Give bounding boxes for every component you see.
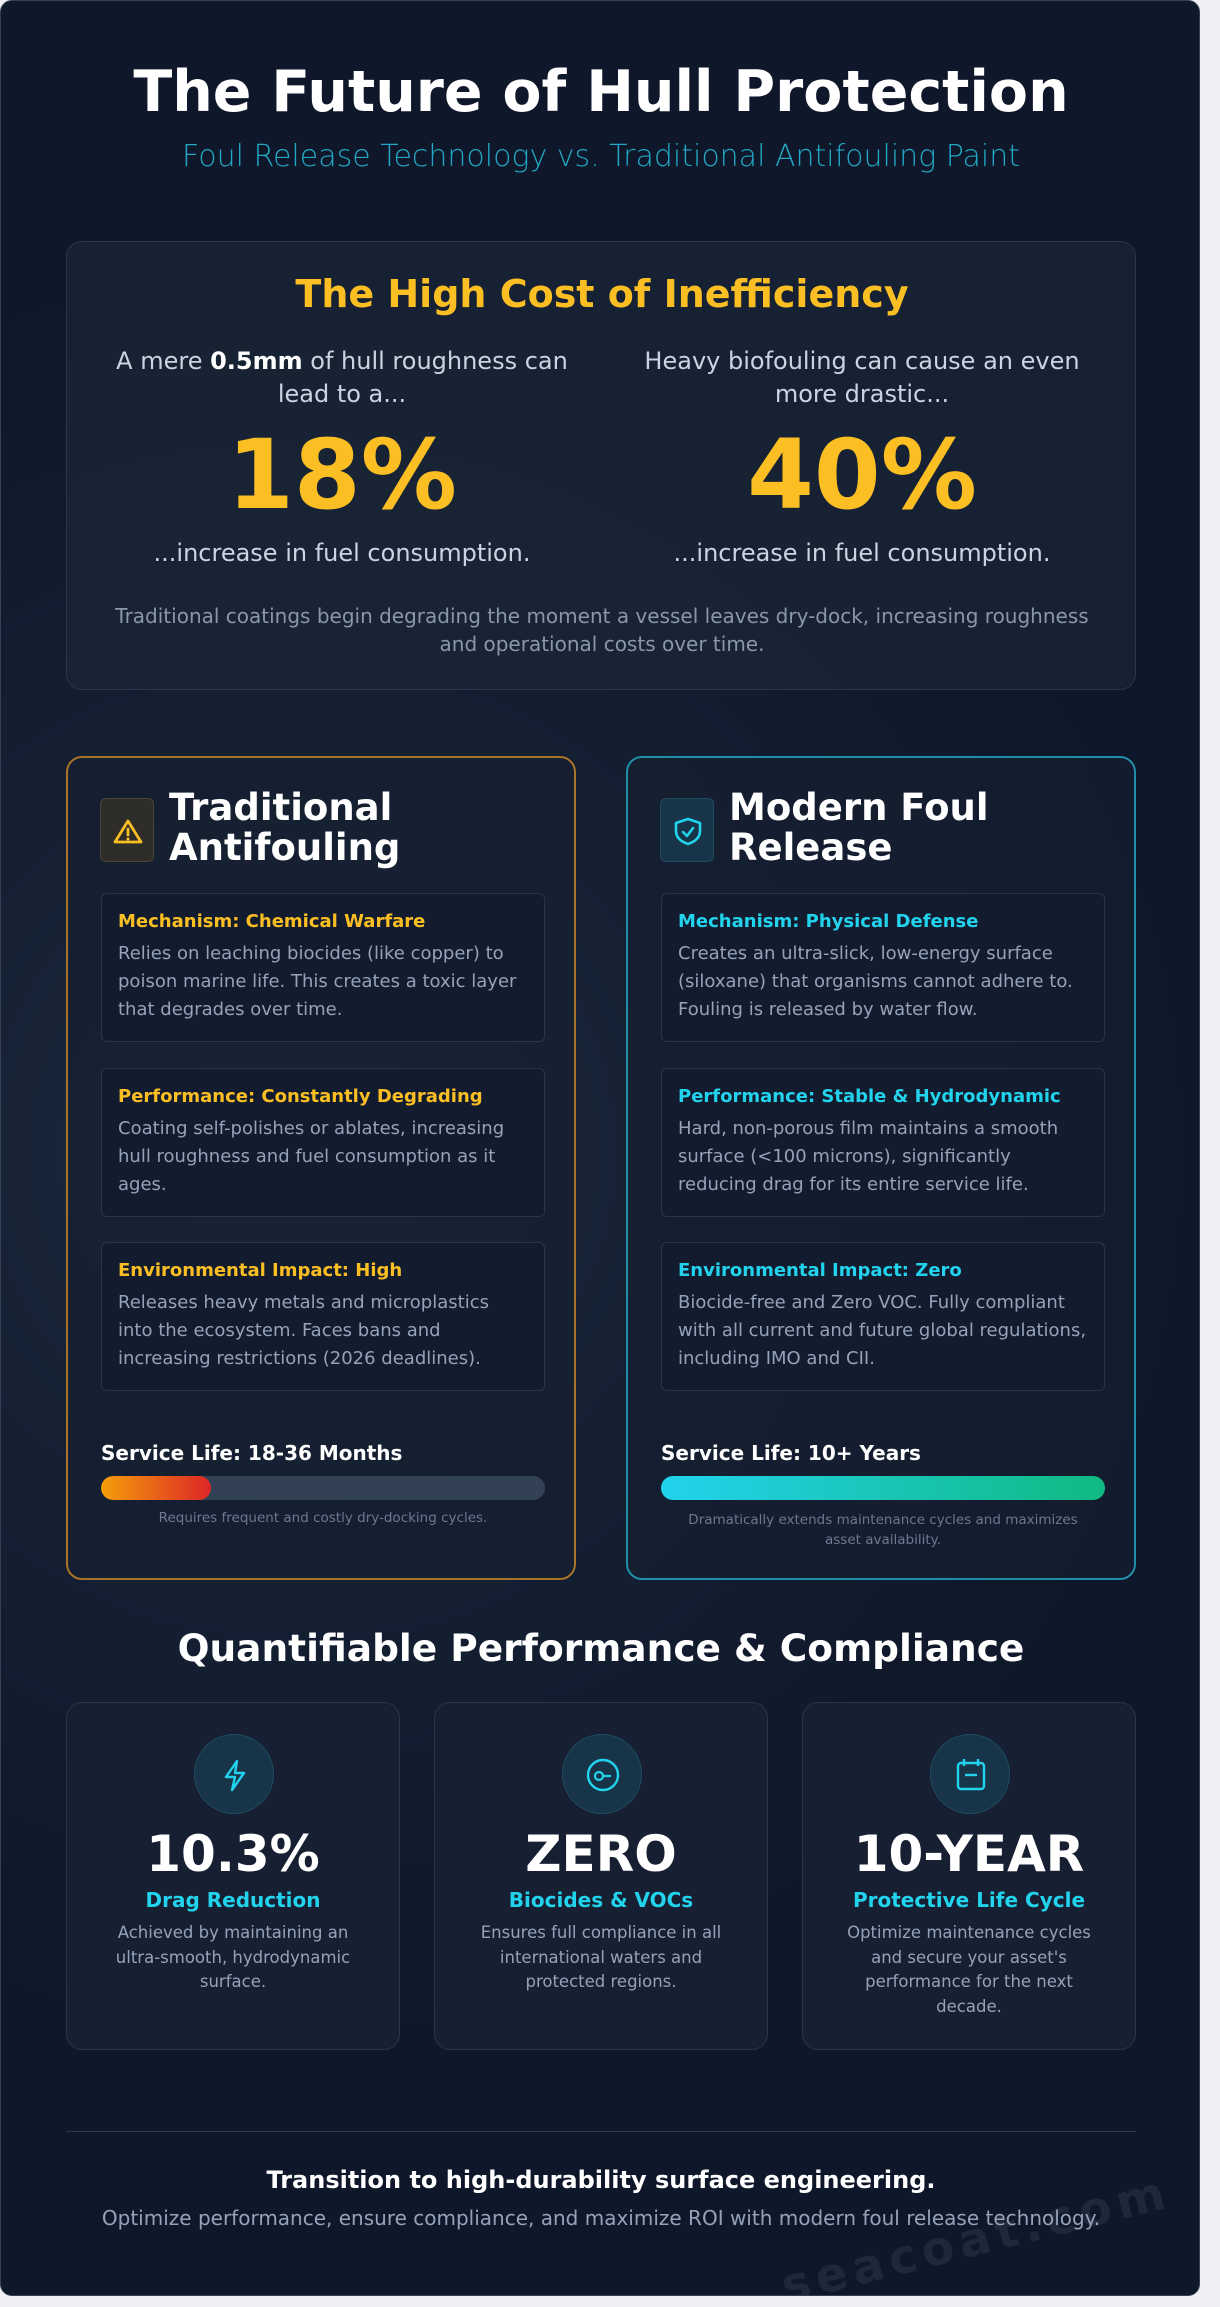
box: performance: Performance: Constantly Degrading [118,1086,483,1107]
box: environmental impact: Environmental Impact: High [118,1260,402,1281]
stat card: drag reduction [66,1702,400,2050]
bar: service life [661,1476,1105,1500]
stat card: drag reduction: Drag Reduction [145,1888,320,1912]
box: environmental impact: Releases heavy metals and microplastics into the ecosystem. Faces bans and increasing restrictions (2026 deadlines). [118,1292,489,1369]
box: environmental impact: Environmental Impact: Zero [678,1260,962,1281]
caption: Dramatically extends maintenance cycles and maximizes asset availability. [688,1512,1078,1548]
box: mechanism: Mechanism: Physical Defense [678,911,978,932]
stat: 40%: Heavy biofouling can cause an even more drastic... [644,347,1080,408]
heading: high cost: The High Cost of Inefficiency [295,272,909,316]
stat card: 10-year: 10-YEAR [854,1825,1084,1883]
stat: 18%: A mere 0.5mm of hull roughness can lead to a... [116,347,568,408]
box: mechanism: Creates an ultra-slick, low-energy surface (siloxane) that organisms cannot adhere to. Fouling is released by water flow. [678,943,1073,1020]
stat: 18%: ...increase in fuel consumption. [154,539,530,567]
icon: shield [660,798,714,862]
stat card: drag reduction: 10.3% [146,1825,320,1883]
box: performance: Hard, non-porous film maintains a smooth surface (<100 microns), significantly reducing drag for its entire service life. [678,1118,1058,1195]
box: performance: Coating self-polishes or ablates, increasing hull roughness and fuel consumption as it ages. [118,1118,504,1195]
heading: Antifouling [169,826,400,869]
heading [169,786,400,869]
stat: 18%: 18% [227,419,457,531]
footer text: Optimize performance, ensure compliance, and maximize ROI with modern foul release technology. [102,2206,1100,2230]
panel: high cost of inefficiency [66,241,1136,690]
heading: Release [729,826,892,869]
heading: Modern Foul [729,786,989,829]
box: environmental impact [101,1242,545,1391]
stat card: 10-year [802,1702,1136,2050]
box: performance [101,1068,545,1217]
stat card: zero biocides [434,1702,768,2050]
stat card: zero biocides: Biocides & VOCs [509,1888,693,1912]
bar: service life [101,1476,545,1500]
stat card: zero biocides: ZERO [525,1825,677,1883]
stat card: zero biocides: Ensures full compliance in all international waters and protected regions. [481,1923,721,1991]
stat card: drag reduction: Achieved by maintaining an ultra-smooth, hydrodynamic surface. [116,1923,350,1991]
service life label: Service Life: 18-36 Months [101,1441,402,1465]
stat: 40%: 40% [747,419,977,531]
icon: no-biocide [562,1734,642,1814]
heading: Traditional [169,786,392,829]
box: mechanism: Mechanism: Chemical Warfare [118,911,425,932]
box: environmental impact: Biocide-free and Zero VOC. Fully compliant with all current and future global regulations, including IMO and CII. [678,1292,1086,1369]
service life label: Service Life: 10+ Years [661,1441,921,1465]
box: performance: Performance: Stable & Hydrodynamic [678,1086,1061,1107]
box: performance [661,1068,1105,1217]
heading [729,786,989,869]
stat: 40%: ...increase in fuel consumption. [674,539,1050,567]
panel: modern foul release [626,756,1136,1580]
stat: 18% [116,347,568,567]
box: mechanism [661,893,1105,1042]
section heading: Quantifiable Performance & Compliance [178,1626,1024,1670]
box: mechanism [101,893,545,1042]
panel: traditional antifouling [66,756,576,1580]
stat card: 10-year: Optimize maintenance cycles and secure your asset's performance for the next decade. [847,1923,1091,2016]
icon: calendar [930,1734,1010,1814]
caption: Requires frequent and costly dry-docking cycles. [159,1510,487,1526]
footer headline: Transition to high-durability surface engineering. [266,2166,936,2194]
box: environmental impact [661,1242,1105,1391]
stat: 40% [644,347,1080,567]
stat card: 10-year: Protective Life Cycle [853,1888,1085,1912]
box: mechanism: Relies on leaching biocides (like copper) to poison marine life. This creates a toxic layer that degrades over time. [118,943,516,1020]
title: The Future of Hull Protection [133,59,1069,125]
footnote: Traditional coatings begin degrading the moment a vessel leaves dry-dock, increasing roughness and operational costs over time. [115,604,1089,656]
subtitle: Foul Release Technology vs. Traditional Antifouling Paint [182,139,1020,174]
icon: lightning [194,1734,274,1814]
icon: warning [100,798,154,862]
